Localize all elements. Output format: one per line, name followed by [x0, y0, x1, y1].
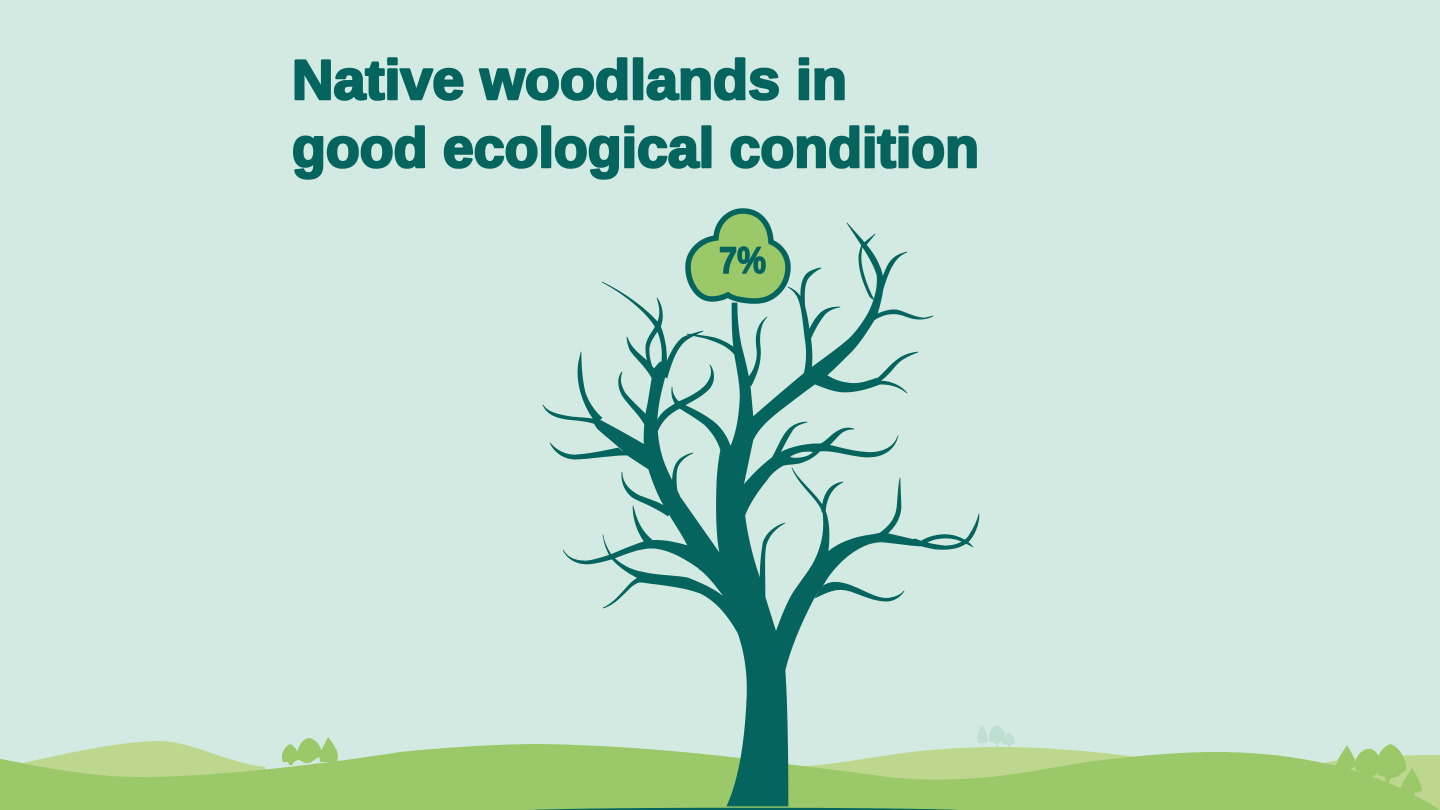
tree group, left [282, 737, 338, 765]
leaf cloud callout: 7% [688, 211, 788, 301]
leaf cloud callout: 7%: 7% [719, 240, 766, 281]
upper right limb [743, 223, 883, 487]
tree group, right [1336, 744, 1422, 796]
lower left upper branch [563, 540, 745, 598]
left limb lower twigs [672, 453, 693, 498]
back hills, light green [23, 741, 1440, 810]
right lower limb, main branch [823, 533, 920, 585]
middle right branch [742, 436, 898, 520]
upper right twigs [859, 242, 874, 300]
left limb upper strands [646, 298, 662, 380]
far left branch [592, 420, 650, 470]
title: Native woodlands in [292, 48, 847, 111]
title: good ecological condition [292, 116, 979, 179]
tree [543, 223, 979, 806]
small twig from trunk [760, 523, 785, 597]
gap in middle right branch [790, 452, 813, 458]
distant trees, faint [977, 725, 1015, 747]
lower left lower branch [603, 535, 750, 633]
left limb [644, 362, 720, 570]
right lower sub branch [815, 582, 904, 601]
ground shadow under tree [530, 808, 960, 810]
title [292, 48, 979, 179]
front hill, green [0, 744, 1440, 810]
right lower limb [776, 468, 838, 670]
central twigs [748, 317, 767, 386]
right lower twigs [880, 478, 901, 536]
trunk and central stem [710, 303, 788, 806]
